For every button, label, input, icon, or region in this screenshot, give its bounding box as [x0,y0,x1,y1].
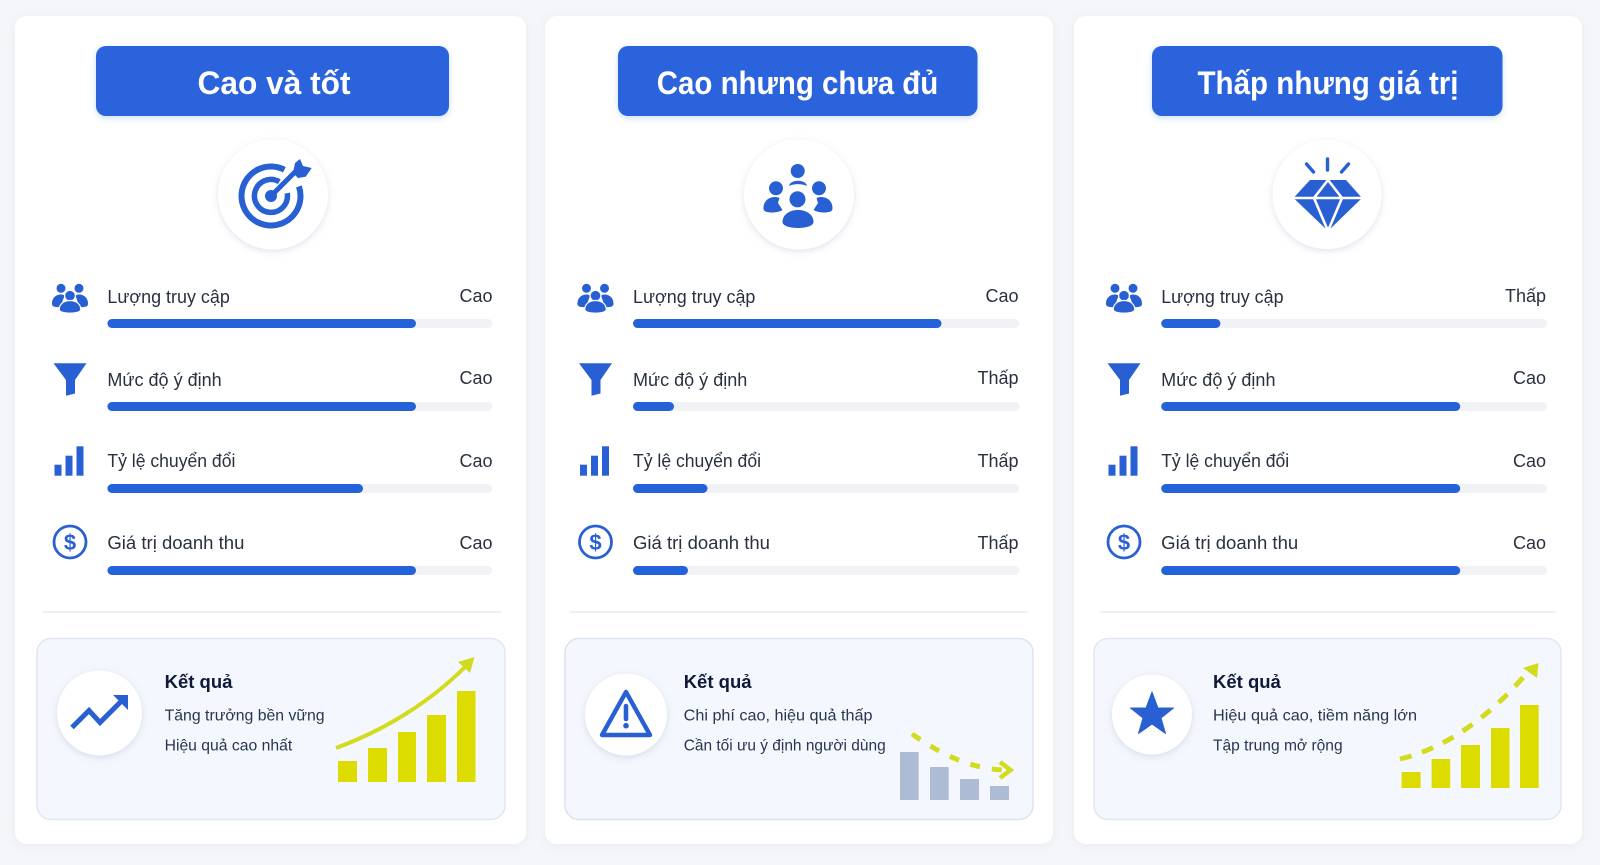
text: kết quả: Cần tối ưu ý định người dùng [684,738,886,754]
metric: Giá trị doanh thu: $ [1118,530,1130,555]
icon: group of people [744,140,854,250]
metric: Mức độ ý định: Mức độ ý định [633,370,747,390]
metric: Tỷ lệ chuyển đổi [1108,446,1547,493]
metric: Mức độ ý định [1108,363,1547,411]
icon: warning triangle [585,674,667,756]
heading: Thấp nhưng giá trị: Thấp nhưng giá trị [1198,65,1458,101]
metric: Lượng truy cập [577,284,1020,328]
metric: Giá trị doanh thu [1108,526,1547,575]
metric: Giá trị doanh thu: Cao [459,533,492,553]
metric: Tỷ lệ chuyển đổi: Tỷ lệ chuyển đổi [633,451,761,471]
metric: Tỷ lệ chuyển đổi: Tỷ lệ chuyển đổi [107,451,235,471]
text: kết quả [165,671,325,754]
metric: Lượng truy cập: Thấp [1505,286,1546,306]
text: kết quả: Tập trung mở rộng [1213,738,1343,754]
callout: Kết quả tăng trưởng [37,638,505,820]
metric: Giá trị doanh thu: Giá trị doanh thu [107,533,244,553]
text: kết quả: Hiệu quả cao, tiềm năng lớn [1213,708,1417,724]
metric: Giá trị doanh thu: Thấp [977,533,1018,553]
metric: Lượng truy cập: Cao [459,286,492,306]
chart: falling grey bars [900,734,1010,800]
metric: Tỷ lệ chuyển đổi [54,446,492,493]
chart: rising yellow bars with dashed arrow [1400,663,1539,788]
text: kết quả: Kết quả [1213,671,1282,692]
metric: Tỷ lệ chuyển đổi: Thấp [977,451,1018,471]
metric: Mức độ ý định [54,363,492,411]
chart: rising yellow bars [336,657,476,782]
icon: diamond [1272,140,1382,249]
metric: Tỷ lệ chuyển đổi: Cao [459,451,492,471]
metric: Tỷ lệ chuyển đổi [580,446,1020,493]
heading: Thấp nhưng giá trị [1152,46,1502,116]
text: kết quả [1213,671,1417,754]
metric: Mức độ ý định: Mức độ ý định [107,370,222,390]
metric: Lượng truy cập: Cao [985,286,1018,306]
metric: Mức độ ý định: Cao [1513,368,1546,388]
metric: Giá trị doanh thu: $ [64,530,76,555]
heading: Cao nhưng chưa đủ: Cao nhưng chưa đủ [657,65,938,101]
icon: trend line [57,670,142,756]
metric: Mức độ ý định: Mức độ ý định [1161,370,1276,390]
metric: Giá trị doanh thu: Cao [1513,533,1546,553]
text: kết quả: Kết quả [684,671,752,692]
metric: Giá trị doanh thu: Giá trị doanh thu [633,533,770,553]
metric: Mức độ ý định: Thấp [977,368,1018,388]
text: kết quả [684,671,886,754]
metric: Giá trị doanh thu [54,526,492,575]
metric: Mức độ ý định [579,363,1020,411]
metric: Mức độ ý định: Cao [459,368,492,388]
text: kết quả: Chi phí cao, hiệu quả thấp [684,708,873,724]
text: kết quả: Hiệu quả cao nhất [165,738,293,754]
heading: Cao và tốt [96,46,449,116]
metric: Lượng truy cập [1106,284,1547,328]
metric: Giá trị doanh thu: $ [589,530,602,555]
panel: Cao và tốt [15,16,526,844]
panel: Cao nhưng chưa đủ [545,16,1053,844]
heading: Cao và tốt: Cao và tốt [198,65,351,101]
text: kết quả: Tăng trưởng bền vững [165,708,325,724]
metric: Lượng truy cập: Lượng truy cập [107,287,230,307]
icon: star [1112,674,1192,754]
callout: Kết quả hiệu quả cao [1094,638,1561,820]
metric: Giá trị doanh thu [580,526,1020,575]
text: kết quả: Kết quả [165,671,233,692]
metric: Tỷ lệ chuyển đổi: Cao [1513,451,1546,471]
callout: Kết quả chi phí cao [565,638,1033,820]
metric: Lượng truy cập [52,284,493,328]
panel: Thấp nhưng giá trị [1074,16,1582,844]
heading: Cao nhưng chưa đủ [618,46,978,116]
icon: target with arrow [218,140,328,250]
metric: Tỷ lệ chuyển đổi: Tỷ lệ chuyển đổi [1161,451,1289,471]
metric: Lượng truy cập: Lượng truy cập [633,287,755,307]
metric: Lượng truy cập: Lượng truy cập [1161,287,1284,307]
metric: Giá trị doanh thu: Giá trị doanh thu [1161,533,1298,553]
